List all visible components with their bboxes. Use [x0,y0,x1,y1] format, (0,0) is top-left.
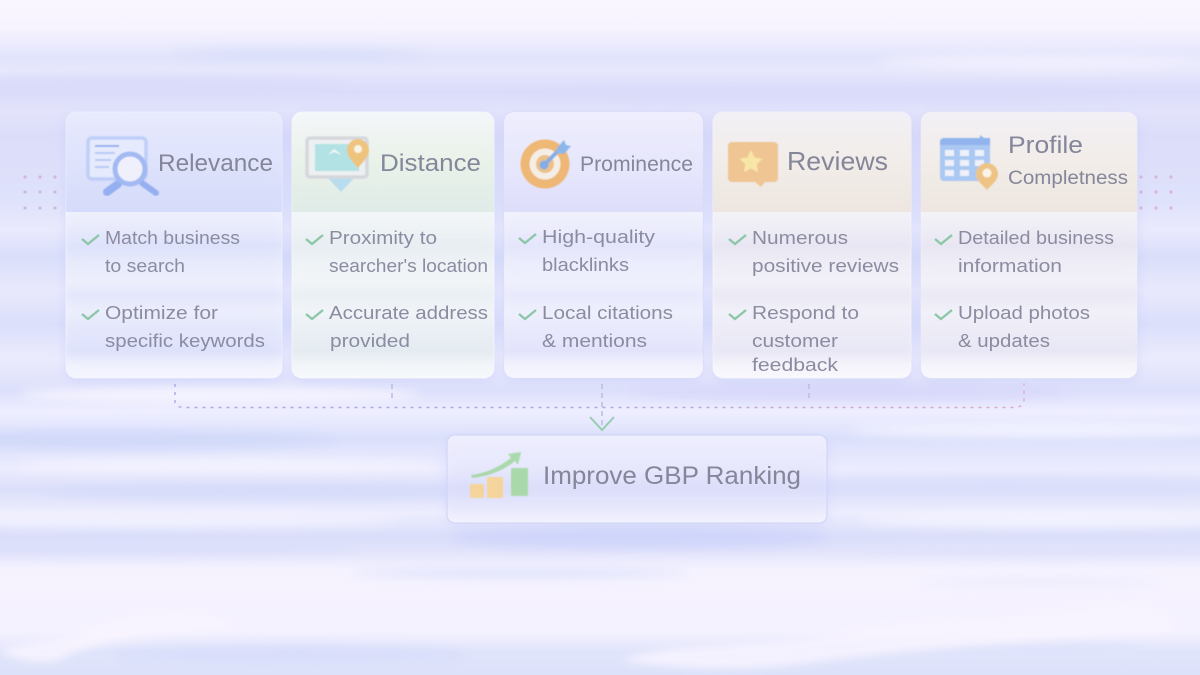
heading: Relevance: Relevance [158,150,273,177]
bullet: positive reviews: positive reviews [752,256,899,276]
bullet: backlinks: High-quality [542,227,655,247]
bullet: respond to feedback: feedback [752,355,839,375]
connector: dashed lines from panels [175,384,1024,426]
bullet: citations [519,303,673,351]
bullet: optimize keywords [82,303,265,351]
icon: star speech bubble [728,142,778,187]
bullet: match business: Match business [105,228,240,248]
panel: Improve GBP Ranking [447,435,827,526]
decorative dot grid: left [23,175,57,210]
bullet: citations: & mentions [542,331,647,351]
decorative dot grid: right [1139,175,1173,210]
bullet: optimize keywords: Optimize for [105,303,218,323]
icon: map with pin [307,138,369,192]
panel: Distance [292,112,494,381]
white cloud crests [0,605,1174,668]
panel: Profile Completness [921,112,1137,381]
bullet: respond to feedback: Respond to [752,303,859,323]
icon: target with dart [520,140,571,188]
bullet: respond to feedback: customer [752,331,838,351]
bullet: backlinks [519,227,655,275]
bullet: match business: to search [105,256,185,276]
bullet: proximity: Proximity to [329,228,437,248]
bullet: photos and updates [935,303,1090,351]
bullet: accurate address [306,303,488,351]
bullet: photos and updates: & updates [958,331,1050,351]
icon: document with magnifier [88,138,156,193]
bullet: positive reviews: Numerous [752,228,848,248]
panel: Prominence [504,112,703,381]
heading: Profile Completness: Profile [1008,132,1083,159]
heading: Prominence: Prominence [580,152,693,176]
bullet: respond to feedback [729,303,859,375]
heading: Improve GBP Ranking: Improve GBP Ranking [543,462,801,490]
bullet: business information [935,228,1114,276]
bullet: proximity [306,228,488,276]
heading: Distance: Distance [380,150,481,177]
icon: rising bar chart [470,452,528,498]
bullet: business information: information [958,256,1062,276]
panel: Relevance [66,112,282,381]
bullet: accurate address: Accurate address [329,303,488,323]
panel: Reviews [713,112,911,381]
icon: calendar grid with pin [940,135,998,190]
heading: Profile Completness: Completness [1008,168,1128,189]
heading: Reviews: Reviews [787,146,888,176]
bullet: positive reviews [729,228,899,276]
bullet: optimize keywords: specific keywords [105,331,265,351]
bullet: citations: Local citations [542,303,673,323]
bullet: business information: Detailed business [958,228,1114,248]
bullet: proximity: searcher's location [329,256,488,276]
bullet: photos and updates: Upload photos [958,303,1090,323]
bullet: backlinks: blacklinks [542,255,629,275]
heading: Profile Completness [1008,132,1128,189]
bullet: accurate address: provided [330,331,410,351]
arrow: down to result [590,417,614,430]
bullet: match business [82,228,240,276]
